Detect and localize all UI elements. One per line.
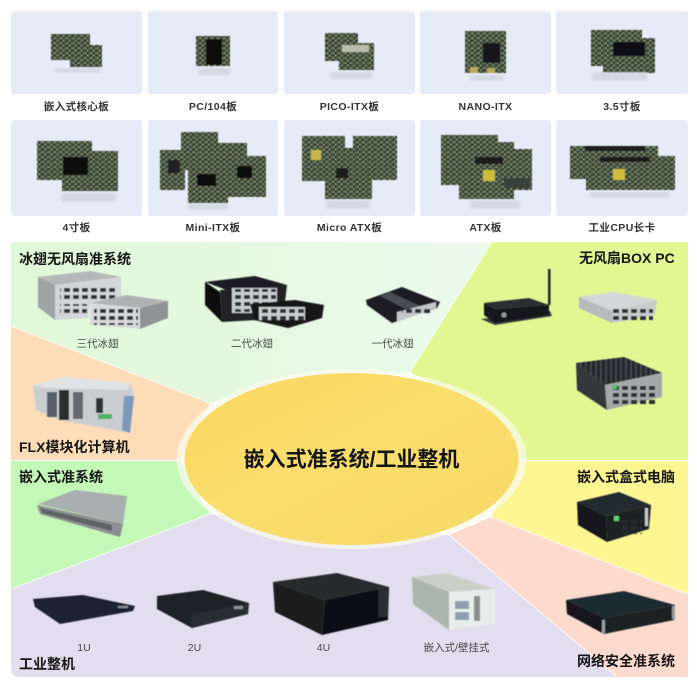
card: ATX板 (420, 120, 551, 234)
card: 嵌入式核心板: 嵌入式核心板 (44, 100, 109, 113)
panel: sector 嵌入式盒式电脑 (491, 461, 688, 594)
card: Mini-ITX板 (148, 120, 278, 234)
card: 工业CPU长卡: 工业CPU长卡 (589, 221, 656, 234)
card: NANO-ITX (420, 11, 551, 113)
heading: 嵌入式准系统: 嵌入式准系统 (19, 469, 103, 485)
card: 4寸板 (11, 120, 142, 234)
label: 二代冰翅: 二代冰翅 (231, 337, 273, 350)
center ellipse: 嵌入式准系统/工业整机 (176, 369, 526, 549)
heading: 冰翅无风扇准系统: 冰翅无风扇准系统 (19, 251, 131, 267)
label: 三代冰翅: 三代冰翅 (76, 337, 119, 350)
heading: 无风扇BOX PC: 无风扇BOX PC (579, 250, 675, 266)
device: silver box (579, 292, 657, 323)
device: 嵌入式准系统 chassis (37, 490, 127, 537)
device: 2U (157, 590, 249, 628)
label: 嵌入式/壁挂式: 嵌入式/壁挂式 (424, 641, 490, 654)
panel: sector 工业整机 (11, 514, 617, 677)
device: FLX chassis (33, 377, 134, 433)
card: 3.5寸板: 3.5寸板 (603, 100, 641, 113)
device: 二代冰翅 (205, 276, 324, 328)
card: 嵌入式核心板 (11, 11, 142, 113)
heading: 工业整机: 工业整机 (19, 656, 75, 672)
card: Micro ATX板 (284, 120, 415, 234)
panel: sector 嵌入式准系统 (11, 461, 210, 589)
device: antenna box (481, 269, 552, 325)
card: PICO-ITX板: PICO-ITX板 (320, 100, 379, 113)
device: 1U (33, 595, 135, 624)
card: PC/104板: PC/104板 (189, 100, 237, 113)
device: 一代冰翅 (366, 287, 440, 323)
center ellipse: 嵌入式准系统/工业整机: 嵌入式准系统/工业整机 (244, 448, 459, 472)
card: PC/104板 (148, 11, 278, 113)
card: PICO-ITX板 (284, 11, 415, 113)
device: finned box (576, 357, 662, 410)
card: 3.5寸板 (556, 11, 688, 113)
heading: 网络安全准系统: 网络安全准系统 (577, 653, 675, 669)
device: 盒式电脑 (577, 492, 651, 542)
label: 1U: 1U (77, 642, 91, 654)
device: 三代冰翅 (38, 271, 168, 329)
card: Micro ATX板: Micro ATX板 (317, 221, 382, 234)
card: NANO-ITX: NANO-ITX (459, 101, 512, 113)
heading: 嵌入式盒式电脑: 嵌入式盒式电脑 (577, 469, 675, 485)
card: 4寸板: 4寸板 (62, 221, 91, 234)
panel: sector 网络安全准系统 (449, 517, 688, 677)
device: 网络安全准系统 (566, 591, 675, 634)
card: ATX板: ATX板 (469, 221, 502, 234)
card: 工业CPU长卡 (556, 120, 688, 234)
device: 嵌入式/壁挂式 (412, 573, 495, 630)
panel: sector 冰翅无风扇准系统 (11, 242, 492, 403)
panel: sector 无风扇BOX PC (410, 242, 688, 460)
label: 一代冰翅: 一代冰翅 (372, 337, 414, 350)
card: Mini-ITX板: Mini-ITX板 (186, 221, 241, 234)
label: 4U: 4U (317, 642, 330, 654)
heading: FLX模块化计算机: FLX模块化计算机 (19, 439, 129, 455)
device: 4U (273, 573, 389, 635)
panel: sector FLX模块化计算机 (11, 326, 210, 460)
label: 2U: 2U (188, 642, 201, 654)
